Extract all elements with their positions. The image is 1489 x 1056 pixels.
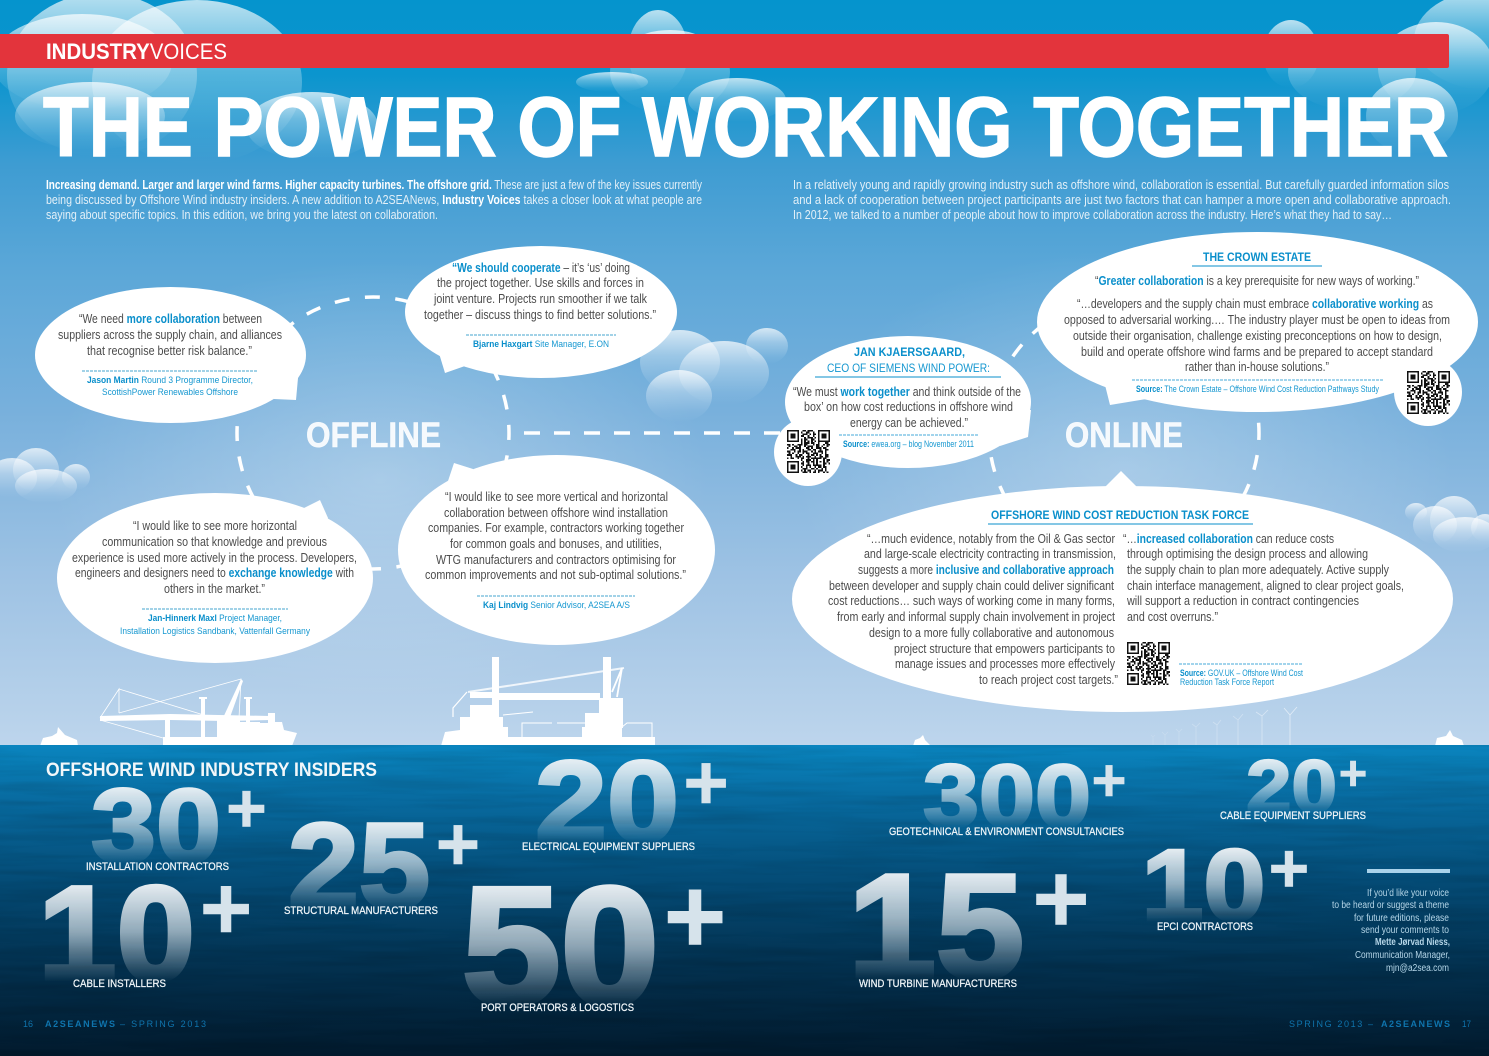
attribution: Kaj Lindvig Senior Advisor, A2SEA A/S	[483, 600, 630, 611]
quote: for common goals and bonuses, and utilities,	[450, 537, 662, 551]
QR code	[786, 429, 831, 474]
quote column right: and cost overruns.”	[1127, 610, 1218, 624]
quote column left: cost reductions… such ways of working come in many forms,	[828, 594, 1115, 608]
sky glow: offline	[50, 260, 710, 700]
speech bubble: The Crown Estate	[1037, 232, 1478, 426]
stat: cable equipment suppliers: 20	[1246, 745, 1337, 828]
speech bubble: Kaj Lindvig	[398, 455, 715, 645]
sky glow: online	[794, 250, 1454, 690]
stat: installation contractors: 30	[91, 768, 221, 885]
quote column left: and large-scale electricity contracting in transmission,	[864, 547, 1116, 561]
icon: small boat left	[40, 727, 78, 746]
stat: cable equipment suppliers: CABLE EQUIPMENT SUPPLIERS	[1220, 810, 1366, 822]
stat: electrical equipment suppliers	[522, 759, 726, 853]
quote	[58, 312, 282, 358]
stat: geotechnical and environment consultancies: +	[1091, 747, 1127, 814]
quote: collaboration between offshore wind installation	[444, 506, 668, 520]
source	[839, 435, 978, 450]
stat: EPCI contractors: +	[1269, 829, 1309, 907]
quote: communication so that knowledge and previous	[102, 535, 327, 549]
stat: geotechnical and environment consultancies: 300	[923, 746, 1091, 846]
insiders heading: OFFSHORE WIND INDUSTRY INSIDERS	[46, 760, 377, 781]
bubble shape	[405, 246, 677, 378]
speech bubble: Offshore Wind Cost Reduction Task Force	[792, 471, 1453, 712]
quote column right: will support a reduction in contract contingencies	[1126, 594, 1359, 608]
quote: rather than in-house solutions.”	[1185, 360, 1329, 374]
stat: electrical equipment suppliers: +	[683, 738, 729, 826]
attribution: Jason Martin Round 3 Programme Director,	[87, 375, 253, 386]
quote	[1064, 274, 1450, 374]
stat: cable installers	[44, 884, 249, 988]
icon: wind turbines	[1151, 707, 1297, 746]
footer left: – SPRING 2013	[120, 1019, 206, 1029]
quote: the project together. Use skills and forces in	[437, 276, 644, 290]
sea background	[0, 745, 1489, 1056]
quote	[793, 385, 1021, 430]
attribution: Bjarne Haxgart Site Manager, E.ON	[473, 339, 609, 350]
source: Reduction Task Force Report	[1180, 677, 1274, 688]
speech bubble: Jan-Hinnerk Maxl	[57, 493, 373, 663]
heading: THE CROWN ESTATE	[1203, 250, 1311, 264]
heading: OFFSHORE WIND COST REDUCTION TASK FORCE	[991, 508, 1249, 522]
source: Source: ewea.org – blog November 2011	[843, 439, 974, 450]
bubble shape	[35, 287, 306, 423]
footer right: SPRING 2013 –	[1289, 1019, 1373, 1029]
footer left: 16	[23, 1019, 33, 1029]
heading: JAN KJAERSGAARD,	[854, 345, 965, 359]
icon: small boat centre	[913, 735, 931, 746]
stat: installation contractors	[86, 787, 264, 870]
stat: cable installers: 10	[38, 858, 195, 1009]
stat: port operators and logistics: PORT OPERATORS & LOGOSTICS	[481, 1002, 634, 1014]
heading	[815, 345, 1001, 377]
bubble shape	[1037, 232, 1478, 426]
bubble shape	[774, 336, 1031, 486]
call for comments: Communication Manager,	[1355, 950, 1450, 961]
call for comments: send your comments to	[1361, 925, 1449, 936]
online label: ONLINE	[1065, 416, 1183, 455]
call for comments	[1332, 869, 1450, 974]
sea ripples	[0, 745, 1489, 1056]
stat: port operators and logistics	[464, 884, 722, 1012]
quote: joint venture. Projects run smoother if we talk	[433, 292, 648, 306]
bubble shape	[57, 493, 373, 663]
speech bubble: Jason Martin	[35, 287, 306, 423]
quote: experience is used more actively in the process. Developers,	[72, 551, 357, 565]
quote: companies. For example, contractors working together	[428, 521, 684, 535]
icon: crane ship left	[100, 679, 297, 746]
stat: installation contractors: +	[226, 769, 267, 847]
footer left: A2SEANEWS	[45, 1019, 115, 1029]
quote column left: between developer and supply chain could deliver significant	[829, 579, 1114, 593]
clouds	[0, 0, 1489, 553]
offline label: OFFLINE	[306, 416, 441, 455]
quote column left: design to a more fully collaborative and autonomous	[869, 626, 1114, 640]
stat: cable installers: CABLE INSTALLERS	[73, 978, 166, 990]
stat: cable equipment suppliers: +	[1339, 747, 1367, 801]
stat: electrical equipment suppliers: 20	[535, 738, 679, 866]
call for comments: If you’d like your voice	[1367, 888, 1449, 899]
dashed connector: online circle	[989, 298, 1259, 568]
speech bubble: Bjarne Haxgart	[405, 246, 677, 378]
stat: port operators and logistics: +	[663, 855, 727, 976]
intro text left: Increasing demand. Larger and larger wind farms. Higher capacity turbines. The offshore grid. These are just a few of the key issues currently	[46, 178, 703, 192]
quote: energy can be achieved.”	[850, 416, 968, 430]
quote column left: suggests a more inclusive and collaborative approach	[858, 563, 1114, 577]
icon: small boat right	[1435, 730, 1464, 746]
source: Source: The Crown Estate – Offshore Wind Cost Reduction Pathways Study	[1136, 384, 1379, 395]
attribution: Jan-Hinnerk Maxl Project Manager,	[148, 613, 282, 624]
dashed connector: link between circles	[524, 431, 790, 435]
stat: wind turbine manufacturers: WIND TURBINE MANUFACTURERS	[859, 978, 1017, 990]
quote column left: project structure that empowers participants to	[894, 642, 1115, 656]
intro text right: In 2012, we talked to a number of people about how to improve collaboration across the industry. Here’s what they had to say…	[793, 208, 1392, 222]
quote column left	[828, 532, 1118, 687]
stat: structural manufacturers: 25	[288, 798, 430, 934]
stat: wind turbine manufacturers: +	[1032, 843, 1090, 953]
quote column right: chain interface management, aligned to clear project goals,	[1127, 579, 1404, 593]
quote column right	[1123, 532, 1404, 624]
stat: port operators and logistics: 50	[462, 852, 659, 1040]
quote	[425, 490, 686, 582]
stat: electrical equipment suppliers: ELECTRICAL EQUIPMENT SUPPLIERS	[522, 841, 695, 853]
stat: structural manufacturers: STRUCTURAL MANUFACTURERS	[284, 905, 438, 917]
quote column left: to reach project cost targets.”	[979, 673, 1118, 687]
dashed connector: offline circle	[237, 297, 509, 569]
stat: wind turbine manufacturers: 15	[848, 843, 1024, 1010]
quote: common improvements and not sub-optimal solutions.”	[425, 568, 686, 582]
stat: cable equipment suppliers	[1220, 758, 1366, 822]
quote: together – discuss things to find better solutions.”	[424, 308, 656, 322]
footer right: 17	[1462, 1019, 1471, 1029]
quote: “We need more collaboration between	[79, 312, 262, 326]
attribution	[120, 609, 310, 637]
source	[1179, 664, 1303, 688]
quote column left: “…much evidence, notably from the Oil & Gas sector	[867, 532, 1115, 546]
source: Source: GOV.UK – Offshore Wind Cost	[1180, 668, 1303, 679]
band label: INDUSTRYVOICES	[46, 39, 227, 64]
quote column right: “…increased collaboration can reduce costs	[1123, 532, 1334, 546]
quote: “Greater collaboration is a key prerequisite for new ways of working.”	[1095, 274, 1419, 288]
quote: that recognise better risk balance.”	[87, 344, 252, 358]
stat: structural manufacturers	[284, 821, 478, 914]
footer left	[23, 1019, 206, 1029]
quote: suppliers across the supply chain, and alliances	[58, 328, 282, 342]
quote: “We should cooperate – it’s ‘us’ doing	[452, 261, 630, 275]
icon: crane ship centre	[441, 657, 655, 746]
call for comments: mjn@a2sea.com	[1386, 963, 1449, 974]
QR code	[1126, 641, 1171, 686]
quote: box’ on how cost reductions in offshore wind	[804, 400, 1013, 414]
call for comments: to be heard or suggest a theme	[1332, 900, 1449, 911]
heading band	[0, 34, 1449, 68]
stat: wind turbine manufacturers	[856, 873, 1086, 988]
stat: geotechnical and environment consultancies	[889, 762, 1124, 836]
footer right	[1289, 1019, 1471, 1029]
stat: structural manufacturers: +	[436, 802, 480, 887]
quote: engineers and designers need to exchange knowledge with	[75, 566, 354, 580]
bubble shape	[398, 455, 715, 645]
quote	[424, 261, 656, 322]
call for comments: for future editions, please	[1354, 913, 1449, 924]
call for comments: Mette Jørvad Niess,	[1375, 937, 1450, 948]
intro text left	[46, 178, 703, 222]
quote: “I would like to see more horizontal	[133, 519, 297, 533]
stat: installation contractors: INSTALLATION CONTRACTORS	[86, 861, 229, 873]
red band	[0, 34, 1449, 68]
intro text left: being discussed by Offshore Wind industry insiders. A new addition to A2SEANews, Industry Voices takes a closer look at what people are	[46, 193, 702, 207]
quote column left: from early and informal supply chain involvement in project	[837, 610, 1115, 624]
bubble shape	[792, 471, 1453, 712]
quote column left: manage issues and processes more effectively	[895, 657, 1116, 671]
intro text left: saying about specific topics. In this edition, we bring you the latest on collaboration.	[46, 208, 438, 222]
quote: “I would like to see more vertical and horizontal	[445, 490, 668, 504]
stat: cable installers: +	[200, 859, 252, 959]
attribution	[82, 371, 258, 398]
quote: WTG manufacturers and contractors optimising for	[436, 553, 676, 567]
stat: EPCI contractors: EPCI CONTRACTORS	[1157, 921, 1253, 933]
quote: “…developers and the supply chain must embrace collaborative working as	[1077, 297, 1433, 311]
attribution: Installation Logistics Sandbank, Vattenfall Germany	[120, 626, 310, 637]
sky background	[0, 0, 1489, 746]
quote: build and operate offshore wind farms and be prepared to accept standard	[1081, 345, 1433, 359]
speech bubble: Jan Kjaersgaard	[774, 336, 1031, 486]
stat: geotechnical and environment consultancies: GEOTECHNICAL & ENVIRONMENT CONSULTANCIES	[889, 826, 1124, 838]
heading: CEO OF SIEMENS WIND POWER:	[827, 361, 990, 375]
quote: “We must work together and think outside of the	[793, 385, 1021, 399]
quote: others in the market.”	[164, 582, 265, 596]
attribution: ScottishPower Renewables Offshore	[102, 387, 238, 398]
quote	[72, 519, 357, 596]
quote column right: the supply chain to plan more adequately. Active supply	[1127, 563, 1390, 577]
stat: EPCI contractors: 10	[1142, 830, 1266, 942]
footer right: A2SEANEWS	[1381, 1019, 1450, 1029]
intro text right	[793, 178, 1451, 222]
QR code	[1406, 370, 1451, 415]
stat: EPCI contractors	[1146, 848, 1307, 930]
quote column right: through optimising the design process and allowing	[1127, 547, 1368, 561]
